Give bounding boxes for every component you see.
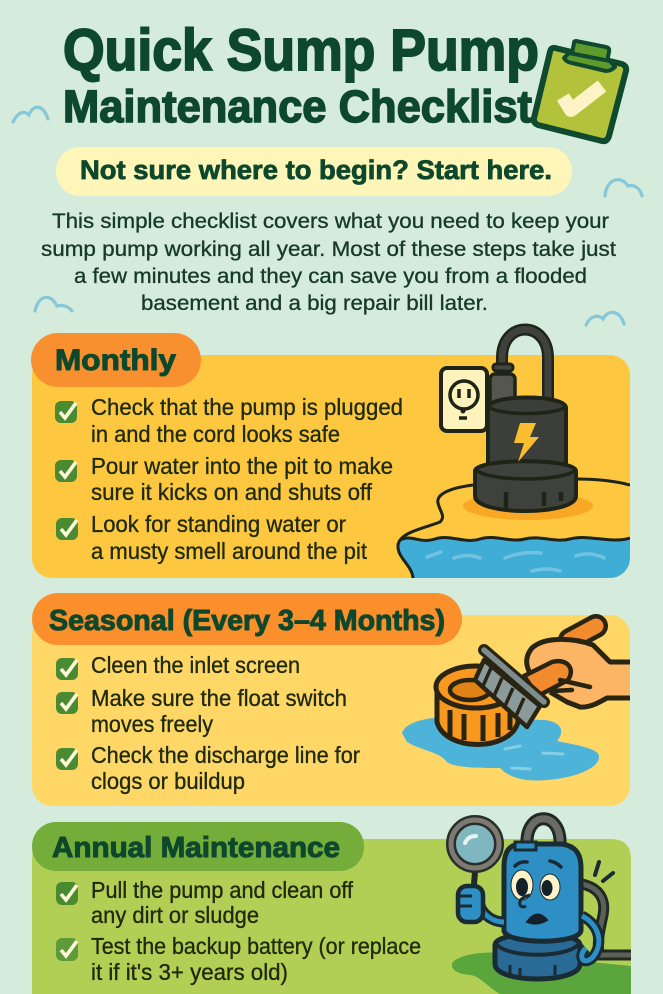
icon: worried pump mascot with magnifier	[451, 819, 631, 979]
heading: annual maintenance: Annual Maintenance	[52, 832, 340, 864]
subtitle pill: Not sure where to begin? Start here.	[80, 155, 552, 185]
check item: backup battery: Test the backup battery (or replace	[91, 933, 421, 959]
check item: standing water: a musty smell around the pit	[91, 538, 368, 564]
illustration: water and ground	[398, 479, 630, 578]
check item: pour water: sure it kicks on and shuts off	[91, 479, 373, 505]
check item: clean pump: any dirt or sludge	[91, 902, 259, 928]
check item: inlet screen: Cleen the inlet screen	[91, 652, 300, 678]
icon: clipboard	[534, 41, 626, 141]
check item: float switch	[56, 685, 347, 737]
check item: standing water: Look for standing water or	[91, 511, 346, 537]
check item: plugged in	[55, 394, 403, 447]
check item: discharge line	[56, 742, 360, 794]
title	[63, 18, 539, 132]
check item: plugged in: Check that the pump is plugged	[91, 394, 403, 420]
check item: float switch: moves freely	[91, 711, 213, 737]
panel: seasonal	[32, 593, 630, 806]
heading: seasonal	[32, 593, 462, 645]
icon: electrical outlet	[441, 368, 487, 431]
check item: backup battery	[56, 933, 421, 985]
heading: monthly	[31, 333, 201, 387]
subtitle pill	[56, 147, 572, 196]
check item: float switch: Make sure the float switch	[91, 685, 347, 711]
icon: sump pump	[475, 330, 576, 511]
check item: clean pump: Pull the pump and clean off	[91, 877, 354, 903]
intro text: sump pump working all year. Most of these steps take just	[41, 237, 616, 261]
intro text: basement and a big repair bill later.	[141, 291, 488, 315]
panel: monthly	[31, 330, 630, 578]
intro text: This simple checklist covers what you need to keep your	[52, 209, 609, 233]
heading: monthly: Monthly	[55, 344, 176, 377]
title: Maintenance Checklist	[63, 81, 532, 132]
decorative birds	[13, 107, 642, 325]
heading: annual maintenance	[32, 822, 364, 871]
icon: inlet strainer	[436, 666, 518, 744]
intro text: a few minutes and they can save you from a flooded	[74, 264, 587, 288]
illustration: puddle	[402, 718, 599, 780]
check item: pour water	[55, 453, 393, 505]
check item: plugged in: in and the cord looks safe	[91, 421, 340, 447]
icon: hand with brush	[475, 626, 630, 727]
check item: clean pump	[56, 877, 354, 928]
heading: seasonal: Seasonal (Every 3–4 Months)	[49, 605, 445, 637]
check item: discharge line: Check the discharge line for	[91, 742, 360, 768]
check item: standing water	[56, 511, 368, 564]
check item: backup battery: it if it's 3+ years old)	[91, 959, 288, 985]
illustration: ground shadow	[452, 952, 631, 994]
intro text	[41, 209, 616, 315]
check item: pour water: Pour water into the pit to make	[91, 453, 393, 479]
title: Quick Sump Pump	[63, 18, 539, 83]
panel: annual maintenance	[32, 819, 631, 994]
check item: discharge line: clogs or buildup	[91, 768, 245, 794]
